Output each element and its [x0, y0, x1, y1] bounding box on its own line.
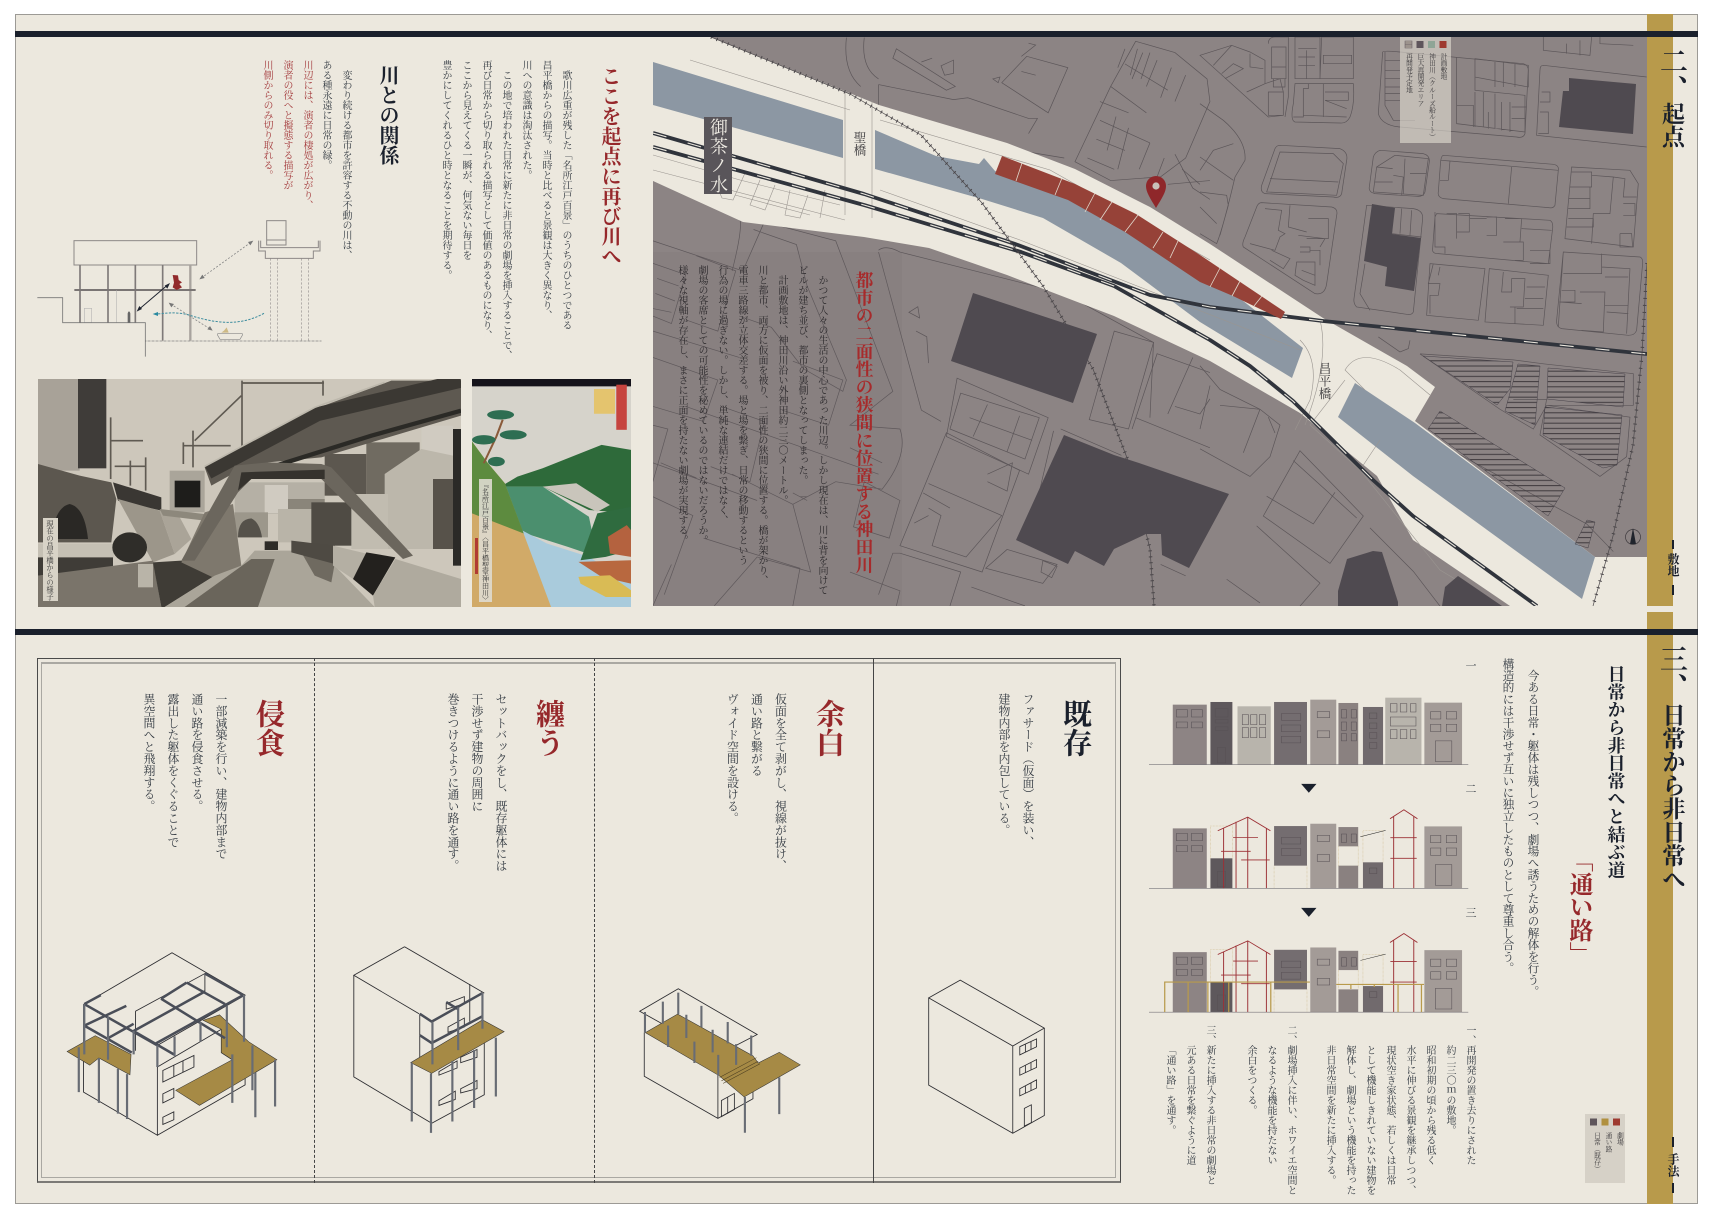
- section diagram: building, river, viaduct: [37, 220, 322, 357]
- step three text: 「通い路」を通す。: [1164, 1045, 1175, 1135]
- section tag: 手法: [1666, 1153, 1680, 1177]
- frame inner rule: [41, 662, 1116, 1178]
- legend swatches: [1404, 40, 1446, 48]
- legend swatches: [1590, 1118, 1620, 1126]
- heading: 既存: [1059, 699, 1091, 757]
- body text: [726, 693, 788, 872]
- text: site description: かつて人々の生活の中心であった川辺。しかし現在は、川に背を向けて: [816, 275, 827, 595]
- step one text: 水平に伸びる景観を継承しつつ、: [1404, 1045, 1415, 1195]
- heading: 纏う: [532, 699, 564, 757]
- red note: 川辺には、演者の棲処が広がり、: [301, 60, 312, 210]
- body text: 昌平橋からの描写。当時と比べると景観は大きく異なり、: [540, 60, 551, 320]
- cream riverside band: [653, 37, 1647, 606]
- tick above tag: [1672, 540, 1674, 549]
- top dark rule: [15, 31, 1698, 37]
- step three text: [1164, 1045, 1216, 1185]
- intro text: 今ある日常・躯体は残しつつ、劇場へ誘うための解体を行う。: [1526, 670, 1540, 997]
- body text: 豊かにしてくれるひと時となることを期待する。: [440, 60, 451, 280]
- step two text: なるような機能を持たない: [1265, 1045, 1276, 1165]
- body text: ヴォイド空間を設ける。: [726, 693, 740, 824]
- step two number: 二、: [1285, 1025, 1296, 1045]
- railway tracks: [653, 37, 1647, 606]
- viaduct and train: [259, 221, 320, 341]
- panel: erosion: [66, 693, 284, 1136]
- marker two: 二: [1464, 783, 1476, 794]
- body text: 露出した躯体をくぐることで: [166, 693, 180, 848]
- step three number: 三、: [1204, 1025, 1215, 1045]
- panel: relation to the river text: [261, 60, 399, 260]
- legend labels: [1592, 1132, 1624, 1172]
- section tag: 敷地: [1666, 553, 1680, 577]
- heading: 余白: [812, 699, 844, 757]
- intro text: [1502, 658, 1540, 997]
- heading: 川との関係: [376, 65, 398, 165]
- actor figure: [173, 275, 182, 290]
- ground: [37, 298, 145, 357]
- sepia photograph drawing: [38, 379, 461, 607]
- photo: present day Shohei bridge: [38, 379, 461, 607]
- section title: 日常から非日常へ: [1658, 703, 1684, 890]
- step two text: [1245, 1045, 1298, 1195]
- step one text: として機能しきれていない建物を: [1364, 1045, 1375, 1195]
- photo caption: [43, 518, 58, 601]
- arrow down: [1301, 784, 1316, 793]
- arrow down: [1301, 908, 1316, 917]
- picture: Hiroshige woodblock print: [472, 379, 631, 607]
- panel: back to the river text: [440, 60, 622, 360]
- divider dashed: [314, 658, 315, 1183]
- step one number: 一、: [1464, 1025, 1475, 1045]
- panel: wrapping: [353, 693, 564, 1133]
- step one text: 現状空き家状態、若しくは日常: [1384, 1045, 1395, 1185]
- body text: セットバックをし、既存躯体には: [494, 693, 508, 872]
- sightline arrows: [137, 241, 264, 331]
- hatched planned redevelopment: [1423, 356, 1625, 548]
- step markers: [1464, 660, 1476, 918]
- body text: ここから見えてくる一瞬が、何気ない毎日を: [460, 60, 471, 260]
- body text: [142, 693, 228, 860]
- stage two: theatre inserted: [1149, 810, 1468, 888]
- step three text: 新たに挿入する非日常の劇場と: [1204, 1045, 1215, 1185]
- body text: 一部減築を行い、建物内部まで: [214, 693, 228, 860]
- body text: 仮面を全て剥がし、視線が抜け、: [774, 693, 788, 872]
- marker three: 三: [1464, 907, 1476, 918]
- caption seal: [475, 538, 478, 574]
- text: site description: 電車三路線が立体交差する。場と場を繋ぎ、日常の移動するという: [736, 265, 747, 565]
- section title: 起点: [1659, 102, 1684, 148]
- body text: 川への意識は淘汰された。: [520, 60, 531, 180]
- body text: [446, 693, 508, 872]
- gold strip: [1647, 14, 1673, 606]
- tick below tag: [1672, 1183, 1674, 1193]
- label: Hijiri bridge: 聖橋: [852, 131, 866, 156]
- marker one: 一: [1464, 660, 1476, 671]
- map drawing: [653, 37, 1647, 606]
- legend labels: 巨大再開発エリア: [1416, 53, 1423, 107]
- legend labels: 通い路: [1604, 1132, 1611, 1152]
- body text: 変わり続ける都市を許容する不動の川は、: [340, 70, 351, 260]
- heading: 侵食: [252, 699, 284, 757]
- river boat: [218, 327, 242, 339]
- text: site description: [676, 265, 828, 595]
- text: site description: 行為の場に過ぎない。しかし、単純な連結だけではなく、: [716, 265, 727, 525]
- frame outer rule: [37, 658, 1121, 1183]
- label: Ochanomizu station: 御茶ノ水: [708, 118, 728, 194]
- audience figure: [128, 311, 130, 323]
- body text: [320, 60, 352, 260]
- red note: 演者の役へと擬態する描写が: [281, 60, 292, 190]
- step two text: 余白をつくる。: [1245, 1045, 1256, 1115]
- legend labels: 神田川（クルーズ船ルート）: [1428, 53, 1434, 140]
- map legend: [1400, 37, 1451, 143]
- print caption: 『名所江戸百景』〈昌平橋聖堂神田川〉: [482, 481, 490, 604]
- body text: 再び日常から切り取られる描写として価値のあるものになり、: [480, 60, 491, 340]
- panel: existing: [928, 693, 1092, 1134]
- body text: 通い路と繋がる: [750, 693, 764, 776]
- icon: location pin: [1146, 176, 1166, 208]
- panel: method explanation: [1164, 658, 1626, 1195]
- keyword: Kayoiji: 「通い路」: [1565, 860, 1591, 954]
- body text: [997, 693, 1035, 848]
- gold strip: [1647, 612, 1673, 1204]
- divider dashed: [594, 658, 595, 1183]
- body text: 干渉せず建物の周囲に: [470, 693, 484, 812]
- step one text: [1324, 1045, 1476, 1195]
- divider solid: [873, 658, 874, 1183]
- tick above tag: [1672, 1137, 1674, 1147]
- red note: 川側からのみ切り取れる。: [261, 60, 272, 180]
- stage three: passage added: [1149, 934, 1468, 1012]
- heading: ここを起点に再び川へ: [598, 66, 620, 266]
- legend labels: 日常（既存）: [1592, 1132, 1600, 1172]
- gold strip header: 起点: [1647, 14, 1687, 606]
- middle dark rule: [15, 629, 1698, 635]
- body text: 巻きつけるように通い路を通す。: [446, 693, 460, 872]
- legend labels: 計画敷地: [1439, 53, 1446, 80]
- river: Kanda: [653, 62, 1595, 599]
- step one text: 再開発の置き去りにされた: [1464, 1045, 1475, 1165]
- isometric: erosion: [66, 952, 278, 1136]
- step one text: 昭和初期の頃から残る低く: [1424, 1045, 1435, 1165]
- legend labels: [1404, 53, 1448, 140]
- icon: north arrow: [1626, 528, 1640, 544]
- method legend: [1585, 1114, 1625, 1183]
- body text: ファサード（仮面）を装い、: [1021, 693, 1035, 848]
- body text: 異空間へと飛翔する。: [142, 693, 156, 812]
- woodblock print drawing: [472, 379, 631, 607]
- body text: 通い路を侵食させる。: [190, 693, 204, 812]
- subheading: 日常から非日常へと結ぶ道: [1606, 665, 1626, 878]
- body text: [440, 60, 572, 360]
- isometric: void: [638, 988, 801, 1133]
- panel: site map: [653, 37, 1647, 606]
- tick below tag: [1672, 585, 1674, 595]
- isometric: wrapping: [353, 946, 505, 1133]
- step two text: 劇場挿入に伴い、ホワイエ空間と: [1285, 1045, 1296, 1195]
- intro text: 構造的には干渉せず互いに独立したものとして尊重し合う。: [1502, 658, 1514, 974]
- photo caption: 現在の昌平橋からの様子: [46, 520, 55, 600]
- panel: four method frame: [37, 658, 1121, 1183]
- text: site description: 川と都市、両方に仮面を被り、二面性の狭間に位置する。橋が架かり、: [756, 265, 767, 585]
- body text: 歌川広重が残した「名所江戸百景」のうちのひとつである: [560, 70, 571, 330]
- body text: この地で培われた日常に新たに非日常の劇場を挿入することで、: [500, 70, 511, 360]
- heading: duality of the city: 都市の二面性の狭間に位置する神田川: [854, 271, 874, 573]
- text overlay block: [653, 252, 902, 606]
- elevation diagrams: three stages: [1149, 698, 1468, 1012]
- isometric: existing building: [928, 980, 1046, 1134]
- planned site: row of red buildings: [995, 156, 1285, 319]
- legend labels: 劇場: [1616, 1132, 1622, 1145]
- street lines: [653, 37, 1647, 606]
- gold strip header: 手法: [1647, 612, 1688, 1204]
- section number: 二、: [1656, 47, 1687, 103]
- red note: [261, 60, 314, 210]
- section number: 三、: [1656, 645, 1687, 701]
- panel: void: [638, 693, 844, 1133]
- label: Shohei bridge: 昌平橋: [1317, 362, 1331, 400]
- body text: 建物内部を内包している。: [997, 693, 1011, 836]
- print caption: [478, 479, 492, 602]
- large redevelopment buildings: [951, 78, 1636, 606]
- step three text: 元ある日常を繋ぐように道: [1184, 1045, 1195, 1165]
- text: site description: 劇場の客席としての可能性を秘めているのではないだろうか。: [696, 265, 707, 545]
- text: site description: 様々な視軸が存在し、まさに正面を持たない劇場が実現する。: [676, 265, 687, 545]
- step one text: 約二三〇ｍの敷地。: [1444, 1045, 1455, 1135]
- riverside thin lines: [653, 60, 1500, 606]
- body text: ある種永遠に日常の緑。: [320, 60, 331, 170]
- step one text: 解体し、劇場という機能を持った: [1344, 1045, 1355, 1195]
- legend labels: 再開発予定地: [1404, 53, 1412, 93]
- stage one: existing street: [1149, 698, 1468, 765]
- step one text: 非日常空間を新たに挿入する。: [1324, 1045, 1335, 1185]
- building frame: [74, 241, 197, 341]
- text: site description: 計画敷地は、神田川沿い外神田約二三〇メートル。: [776, 275, 787, 505]
- text: site description: ビルが建ち並び、都市の裏側となってしまった。: [796, 265, 807, 485]
